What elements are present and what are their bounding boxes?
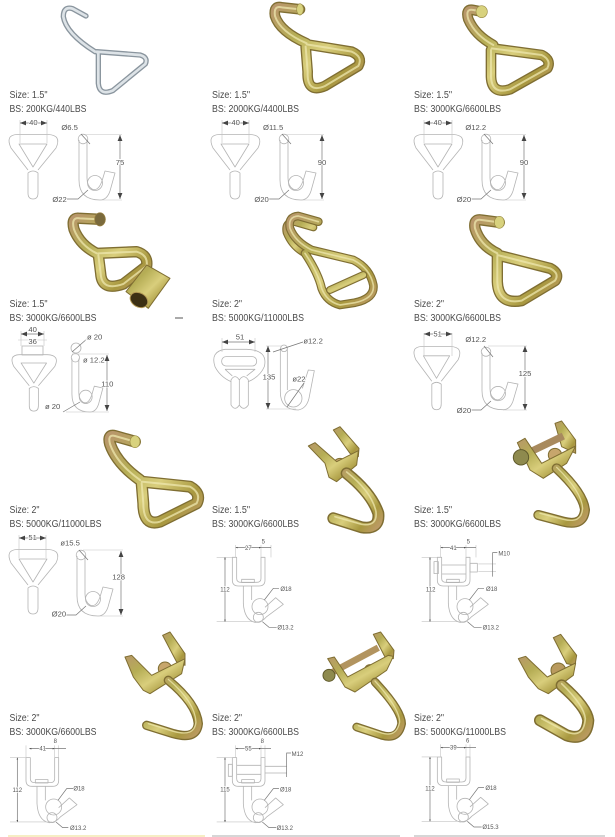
technical drawing: ø 20: [87, 332, 102, 341]
size and breaking strength: BS: 3000KG/6600LBS: [414, 519, 501, 530]
technical drawing: 51: [433, 329, 442, 338]
technical drawing: Ø20: [457, 406, 471, 415]
product photo: swivel J hook: [125, 632, 198, 736]
spec item: 2 inch 3000KG hook: [414, 216, 557, 415]
technical drawing: 40: [231, 118, 240, 127]
technical drawing: 40: [28, 325, 37, 334]
size and breaking strength: Size: 2": [10, 713, 40, 724]
technical drawing: 112: [220, 587, 230, 593]
size and breaking strength: [10, 299, 97, 324]
size and breaking strength: BS: 3000KG/6600LBS: [10, 727, 97, 738]
size and breaking strength: Size: 1.5": [414, 505, 452, 516]
technical drawing: 75: [116, 158, 124, 167]
technical drawing: 125: [519, 369, 531, 378]
product photo: double wire gold hook: [286, 216, 373, 305]
size and breaking strength: BS: 3000KG/6600LBS: [414, 313, 501, 324]
product photo: swivel J hook with bolt: [323, 632, 402, 736]
product photo: gold hook: [275, 4, 360, 88]
product photo: silver hook: [63, 8, 146, 92]
technical drawing: Ø6.5: [61, 123, 78, 132]
size and breaking strength: BS: 5000KG/11000LBS: [10, 519, 102, 530]
size and breaking strength: [212, 90, 299, 115]
spec item: 1.5 inch silver hook: [9, 8, 146, 204]
technical drawing: Ø18: [280, 587, 292, 593]
technical drawing: 135: [263, 373, 275, 382]
technical drawing: Ø22: [52, 195, 67, 204]
product photo: swivel J hook with bolt: [513, 421, 585, 523]
stray mark: [175, 317, 183, 319]
technical drawing: Ø11.5: [263, 123, 283, 132]
spec item: 2 inch swivel hook with bolt: [212, 632, 402, 832]
technical drawing: Ø13.2: [483, 625, 500, 631]
technical drawing: Ø20: [254, 195, 269, 204]
size and breaking strength: [212, 505, 299, 530]
technical drawing: 5: [467, 539, 471, 545]
product photo: swivel J hook: [308, 427, 378, 528]
technical drawing: 40: [29, 118, 38, 127]
spec item: 2 inch 5000KG hook: [9, 436, 198, 619]
technical drawing: [422, 738, 499, 831]
technical drawing: 5: [262, 539, 266, 545]
technical drawing: Ø13.2: [277, 625, 294, 631]
product photo: gold hook: [109, 436, 198, 523]
technical drawing: 90: [520, 158, 528, 167]
technical drawing: [414, 329, 531, 415]
spec item: 1.5 inch 2000KG hook: [211, 4, 360, 204]
bottom rule: middle: [212, 835, 400, 837]
technical drawing: [9, 118, 124, 204]
size and breaking strength: BS: 3000KG/6600LBS: [10, 313, 97, 324]
technical drawing: ø 12.2: [83, 355, 105, 364]
technical drawing: 36: [28, 337, 37, 346]
size and breaking strength: Size: 2": [414, 299, 444, 310]
size and breaking strength: BS: 3000KG/6600LBS: [212, 727, 299, 738]
technical drawing: [422, 539, 511, 631]
bottom rule: right: [414, 835, 605, 837]
spec item: 1.5 inch hook with tube: [10, 213, 183, 412]
technical drawing: 6: [466, 738, 470, 744]
technical drawing: Ø20: [52, 610, 66, 619]
technical drawing: 39: [450, 745, 457, 751]
technical drawing: 110: [101, 380, 113, 389]
spec item: 1.5 inch swivel hook: [212, 427, 378, 631]
technical drawing: M12: [292, 752, 304, 758]
size and breaking strength: BS: 5000KG/11000LBS: [414, 727, 506, 738]
size and breaking strength: [212, 299, 304, 324]
technical drawing: 90: [318, 158, 326, 167]
technical drawing: 128: [112, 572, 125, 581]
technical drawing: Ø12.2: [465, 123, 486, 132]
technical drawing: ø12.2: [303, 336, 323, 345]
bottom rule: left: [8, 835, 205, 837]
size and breaking strength: BS: 200KG/440LBS: [10, 104, 87, 115]
technical drawing: Ø20: [457, 195, 471, 204]
size and breaking strength: Size: 2": [212, 299, 242, 310]
technical drawing: ø 20: [45, 402, 60, 411]
size and breaking strength: Size: 1.5": [10, 90, 48, 101]
technical drawing: 8: [261, 739, 265, 745]
technical drawing: 112: [13, 788, 23, 794]
technical drawing: Ø18: [486, 587, 498, 593]
technical drawing: 112: [426, 587, 436, 593]
size and breaking strength: Size: 2": [414, 713, 444, 724]
technical drawing: 112: [425, 787, 435, 793]
technical drawing: 8: [54, 739, 58, 745]
size and breaking strength: BS: 3000KG/6600LBS: [212, 519, 299, 530]
product photo: gold hook: [467, 6, 549, 91]
technical drawing: Ø18: [485, 786, 497, 792]
size and breaking strength: Size: 2": [10, 505, 40, 516]
technical drawing: Ø18: [73, 787, 85, 793]
technical drawing: Ø18: [280, 787, 292, 793]
size and breaking strength: Size: 1.5": [212, 90, 250, 101]
size and breaking strength: Size: 1.5": [212, 505, 250, 516]
size and breaking strength: Size: 1.5": [414, 90, 452, 101]
technical drawing: Ø15.3: [482, 825, 499, 831]
technical drawing: 51: [28, 533, 37, 542]
spec item: 2 inch swivel hook: [10, 632, 198, 832]
technical drawing: 55: [245, 746, 252, 752]
size and breaking strength: Size: 1.5": [10, 299, 48, 310]
technical drawing: [214, 333, 323, 410]
size and breaking strength: Size: 2": [212, 713, 242, 724]
spec item: 2 inch 5000KG swivel hook: [414, 634, 588, 831]
size and breaking strength: [414, 299, 501, 324]
technical drawing: [217, 539, 294, 631]
technical drawing: ø22: [292, 374, 306, 383]
size and breaking strength: [414, 90, 501, 115]
technical drawing: 41: [450, 546, 457, 552]
technical drawing: [9, 533, 125, 619]
product photo: swivel J hook: [518, 634, 588, 737]
technical drawing: [211, 118, 326, 204]
product photo: gold hook: [475, 216, 557, 301]
technical drawing: 27: [245, 546, 252, 552]
size and breaking strength: [10, 90, 87, 115]
technical drawing: 51: [236, 333, 244, 342]
spec item: 1.5 inch 3000KG hook: [414, 6, 549, 204]
technical drawing: [12, 325, 113, 412]
technical drawing: 115: [220, 788, 230, 794]
technical drawing: 40: [433, 118, 442, 127]
product photo: gold hook with sleeve: [73, 213, 170, 311]
spec item: 2 inch double wire hook: [212, 216, 373, 410]
technical drawing: Ø13.2: [70, 826, 87, 832]
technical drawing: [217, 739, 304, 832]
size and breaking strength: BS: 2000KG/4400LBS: [212, 104, 299, 115]
size and breaking strength: [414, 505, 501, 530]
size and breaking strength: BS: 5000KG/11000LBS: [212, 313, 304, 324]
size and breaking strength: [414, 713, 506, 738]
technical drawing: M10: [498, 552, 511, 558]
technical drawing: ø15.5: [60, 538, 80, 547]
size and breaking strength: [10, 505, 102, 530]
size and breaking strength: [212, 713, 299, 738]
size and breaking strength: [10, 713, 97, 738]
size and breaking strength: BS: 3000KG/6600LBS: [414, 104, 501, 115]
spec item: 1.5 inch swivel hook with bolt: [414, 421, 585, 631]
technical drawing: Ø12.2: [465, 335, 486, 344]
technical drawing: [10, 739, 87, 832]
technical drawing: Ø13.2: [277, 826, 294, 832]
technical drawing: 41: [39, 746, 47, 752]
technical drawing: [414, 118, 528, 204]
